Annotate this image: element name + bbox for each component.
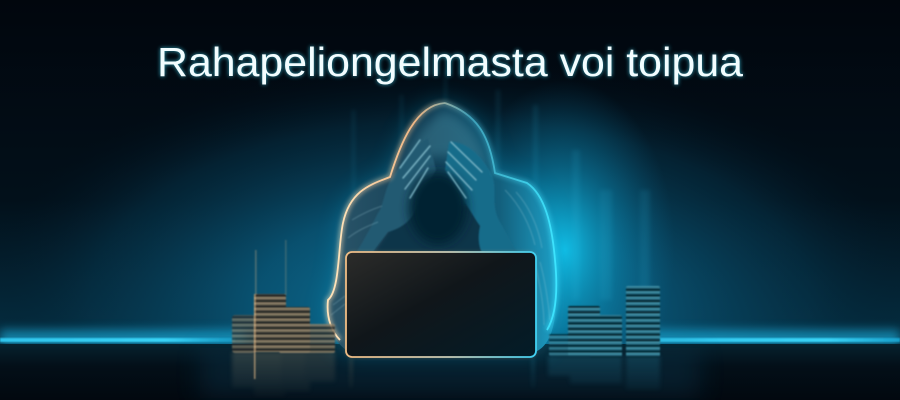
reflective floor <box>0 344 900 400</box>
chest shadow <box>372 205 505 255</box>
stack c <box>590 315 622 357</box>
right arm <box>445 142 518 253</box>
stack 1 <box>232 315 255 353</box>
title: Rahapeliongelmasta voi toipua <box>157 39 743 85</box>
sleeve shading <box>331 190 550 325</box>
stack d <box>626 286 660 357</box>
shadowed face <box>409 172 467 244</box>
title: Rahapeliongelmasta voi toipua <box>157 39 743 85</box>
laptop <box>346 252 536 357</box>
coin stacks left <box>232 240 335 379</box>
horizon light line <box>0 330 900 346</box>
hood highlight <box>405 112 488 172</box>
hand finger highlights <box>400 140 482 198</box>
stack 3 <box>279 307 310 353</box>
left arm <box>356 138 436 253</box>
body silhouette <box>328 103 556 352</box>
rim light <box>328 103 556 340</box>
body glow <box>328 103 556 352</box>
stack b <box>568 306 600 356</box>
person in hood <box>328 103 556 352</box>
coin stacks right <box>549 286 660 357</box>
stack 2 <box>254 294 286 352</box>
stack a <box>549 334 576 356</box>
stack 4 <box>304 324 335 353</box>
